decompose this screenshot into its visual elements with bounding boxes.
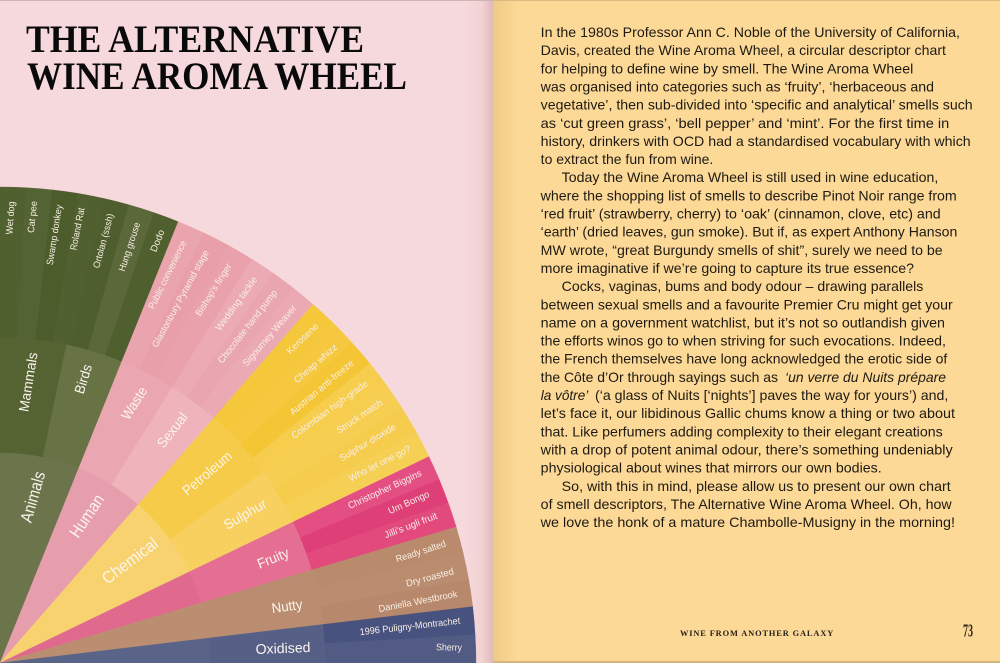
text block: paragraph 3: (‘a glass of Nuits [‘nights’] paves the way for yours’) and, bbox=[595, 388, 948, 403]
category: Human: Public convenience bbox=[147, 239, 189, 311]
category: Animals: Cat pee bbox=[26, 201, 40, 233]
category: Human: Sexual bbox=[153, 409, 191, 451]
category: Animals: Dodo bbox=[149, 228, 167, 254]
category: Human bbox=[0, 222, 313, 663]
category: Nutty: Daniella Westbrook bbox=[378, 589, 458, 615]
category: Animals: Birds bbox=[71, 362, 95, 396]
category: Animals: Roland Rat bbox=[68, 207, 88, 251]
category: Chemical: Struck match bbox=[335, 398, 385, 436]
category: Oxidised: Sherry bbox=[436, 642, 462, 654]
category: Animals: Animals bbox=[17, 469, 49, 525]
category: Animals: Hung grouse bbox=[117, 221, 143, 273]
category: Nutty: Dry roasted bbox=[405, 566, 455, 590]
category: Nutty: Nutty bbox=[271, 596, 303, 616]
category: Nutty: Ready salted bbox=[395, 539, 447, 565]
category: Chemical: Chemical bbox=[98, 534, 162, 588]
text block: paragraph 3: Cocks, vaginas, bums and body odour – drawing parallels bbox=[562, 279, 923, 294]
category: Chemical: Petroleum bbox=[179, 448, 235, 498]
category: Chemical bbox=[0, 304, 429, 663]
text block: paragraph 3: that. Like perfumers adding complexity to their elegant creations bbox=[541, 424, 943, 439]
text block: paragraph 2: Today the Wine Aroma Wheel is still used in wine education, bbox=[562, 170, 938, 185]
text block: paragraph 2: MW wrote, “great Burgundy smells of shit”, surely we need to be bbox=[541, 243, 943, 258]
category: Chemical: Sulphur bbox=[221, 495, 270, 533]
text block: paragraph 4: So, with this in mind, please allow us to present our own chart bbox=[562, 479, 951, 494]
footer: page number: 73 bbox=[963, 620, 973, 640]
category: Oxidised bbox=[0, 607, 476, 663]
text block: paragraph 3: with a drop of potent animal odour, there’s something undeniably bbox=[540, 442, 953, 457]
text block: paragraph 3: the French themselves have long acknowledged the erotic side of bbox=[541, 352, 948, 367]
category: Animals: Wet dog bbox=[4, 201, 18, 235]
text block: paragraph 3 bbox=[540, 279, 955, 476]
category: Chemical: Cheap whizz bbox=[292, 342, 340, 386]
category: Animals: Mammals bbox=[15, 351, 41, 413]
text block: paragraph 4: of smell descriptors, The Alternative Wine Aroma Wheel. Oh, how bbox=[541, 497, 952, 512]
right page background bbox=[493, 0, 1000, 663]
text block: paragraph 2: where the shopping list of smells to describe Pinot Noir range from bbox=[540, 188, 957, 203]
text block: paragraph 1: history, drinkers with OCD had a standardised vocabulary with which bbox=[541, 134, 971, 149]
text block: paragraph 3: between sexual smells and a favourite Premier Cru might get your bbox=[541, 297, 953, 312]
category: Human: Chocolate hand pump bbox=[216, 288, 280, 366]
text block: paragraph 2: more imaginative if we’re going to capture its true essence? bbox=[541, 261, 914, 276]
category: Chemical: Austrian anti-freeze bbox=[288, 358, 356, 418]
category: Human: Glastonbury Pyramid stage bbox=[150, 248, 212, 350]
title bbox=[26, 17, 407, 98]
title: WINE AROMA WHEEL bbox=[27, 54, 407, 98]
category: Chemical: Sulphur dioxide bbox=[338, 422, 398, 464]
text block: paragraph 3: let’s face it, our libidinous Gallic chums know a thing or two about bbox=[541, 406, 955, 421]
category: Chemical: Who let one go? bbox=[347, 444, 413, 484]
category: Nutty bbox=[0, 527, 473, 663]
text block: paragraph 3: the Côte d’Or through sayings such as bbox=[541, 370, 778, 385]
text block: paragraph 3: ‘un verre du Nuits prépare bbox=[785, 370, 946, 385]
left page background bbox=[0, 0, 493, 663]
text block: paragraph 2 bbox=[540, 170, 957, 276]
text block: paragraph 1 bbox=[540, 25, 973, 167]
category: Human: Human bbox=[66, 491, 108, 541]
category: Fruity: Jilli's ugli fruit bbox=[383, 511, 439, 541]
text block: paragraph 1: In the 1980s Professor Ann C. Noble of the University of California, bbox=[541, 25, 960, 40]
category: Fruity: Fruity bbox=[255, 544, 291, 572]
text block: paragraph 1: vegetative’, then sub-divided into ‘specific and analytical’ smells such bbox=[541, 98, 973, 113]
category: Animals bbox=[0, 187, 178, 663]
text block: paragraph 3: physiological about wines that mirrors our own bodies. bbox=[541, 461, 882, 476]
text block: paragraph 4 bbox=[540, 479, 955, 530]
title: THE ALTERNATIVE bbox=[26, 17, 364, 61]
category: Fruity bbox=[0, 457, 456, 663]
chart: aroma wheel bbox=[0, 187, 476, 663]
category: Animals: Ortolan (sssh) bbox=[91, 213, 117, 269]
text block: paragraph 1: to extract the fun from wine. bbox=[541, 152, 713, 167]
category: Fruity: Christopher Biggins bbox=[346, 468, 424, 512]
category: Human: Bishop's finger bbox=[193, 261, 235, 318]
text block: paragraph 3: la vôtre’ bbox=[541, 388, 589, 403]
text block: paragraph 1: was organised into categories such as ‘fruity’, ‘herbaceous and bbox=[540, 79, 934, 94]
text block: paragraph 3: the efforts winos go to when striving for such evocations. Indeed, bbox=[541, 334, 946, 349]
text block: paragraph 2: ‘earth’ (dried leaves, gun smoke). But if, as expert Anthony Hanson bbox=[541, 225, 957, 240]
category: Oxidised: 1996 Puligny-Montrachet bbox=[359, 616, 461, 638]
text block: paragraph 1: as ‘cut green grass’, ‘bell pepper’ and ‘mint’. For the first time in bbox=[541, 116, 949, 131]
text block: paragraph 4: we love the honk of a mature Chambolle-Musigny in the morning! bbox=[540, 515, 955, 530]
category: Fruity: Um Bongo bbox=[387, 489, 431, 517]
category: Human: Wedding tackle bbox=[214, 275, 260, 333]
category: Animals: Swamp donkey bbox=[45, 204, 65, 266]
text block: paragraph 1: for helping to define wine by smell. The Wine Aroma Wheel bbox=[541, 61, 913, 76]
text block: paragraph 3: name on a government watchlist, but it’s not so outlandish given bbox=[541, 315, 945, 330]
category: Human: Sigourney Weaver bbox=[241, 303, 300, 369]
category: Human: Waste bbox=[118, 383, 150, 423]
category: Chemical: Kerosene bbox=[285, 321, 321, 357]
text block: paragraph 1: Davis, created the Wine Aroma Wheel, a circular descriptor chart bbox=[541, 43, 946, 58]
footer: book title: WINE FROM ANOTHER GALAXY bbox=[680, 629, 833, 638]
text block: paragraph 2: ‘red fruit’ (strawberry, cherry) to ‘oak’ (cinnamon, clove, etc) and bbox=[541, 206, 941, 222]
category: Oxidised: Oxidised bbox=[255, 639, 311, 657]
category: Chemical: Colombian high-grade bbox=[290, 379, 370, 441]
